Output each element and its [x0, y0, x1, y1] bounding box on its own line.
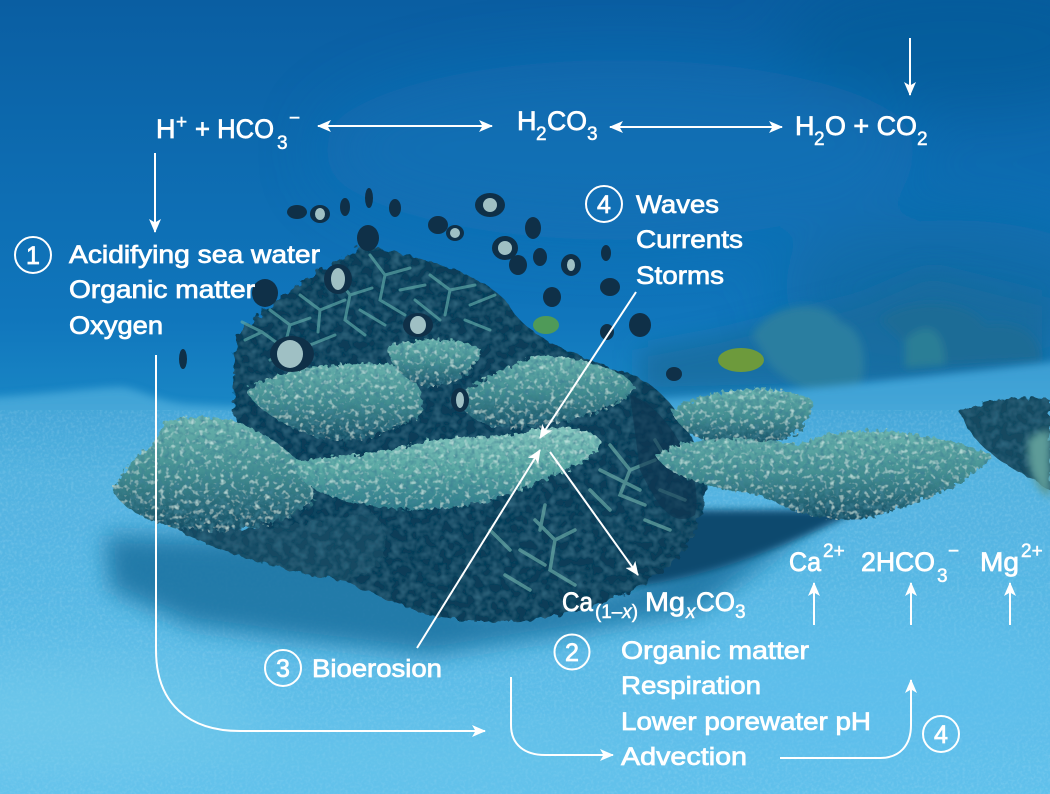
- number badge 3: [265, 650, 301, 686]
- formula: magnesian calcite: 3: [735, 602, 746, 623]
- text block: step 1 inputs: Oxygen: [69, 312, 163, 340]
- formula: magnesium ion: Mg: [980, 547, 1019, 577]
- equation: H2CO3: 2: [536, 124, 547, 145]
- equation: H2O + CO2: H: [795, 111, 814, 141]
- equation: H2O + CO2: O + CO: [825, 111, 917, 141]
- arrow: CO2 input from atmosphere: [909, 38, 911, 95]
- school of fish: [179, 188, 682, 412]
- background: distant reef: [640, 270, 1050, 399]
- number badge 3: 3: [276, 655, 290, 683]
- text block: physical forces: [636, 191, 743, 290]
- arrow: bioerosion to coral: [417, 450, 540, 648]
- arrow: sea water flowing to sediment: [156, 355, 485, 731]
- equation: H+ + HCO3-: +: [176, 112, 187, 133]
- label: bioerosion: Bioerosion: [312, 655, 442, 683]
- formula: bicarbonate ions: 2HCO: [861, 547, 935, 577]
- formula: magnesian calcite: Ca: [562, 587, 594, 617]
- equation: H+ + HCO3-: + HCO: [195, 114, 274, 144]
- coral: right edge outcrop: [960, 398, 1050, 498]
- equation: H+ + HCO3-: 3: [277, 133, 288, 154]
- formula: magnesium ion: 2+: [1021, 541, 1043, 562]
- coral: dark rear mass: [233, 245, 705, 621]
- arrow: calcium release: [813, 583, 815, 625]
- text block: step 1 inputs: [69, 241, 320, 340]
- coral: upper right table: [455, 356, 635, 429]
- text block: physical forces: Storms: [636, 262, 724, 290]
- equation: H+ + HCO3-: [156, 108, 300, 154]
- coral: upper left table: [246, 364, 422, 441]
- arrow: advection up to dissolved ions: [780, 680, 911, 758]
- formula: bicarbonate ions: −: [948, 541, 959, 562]
- formula: magnesian calcite: x: [685, 602, 697, 623]
- formula: magnesian calcite: (1–x): [595, 602, 638, 623]
- formula: calcium ion: [789, 541, 845, 577]
- arrow: carbonic acid and CO2 equilibrium: [610, 126, 782, 128]
- coral: upper centre table: [386, 340, 482, 387]
- formula: bicarbonate ions: [861, 541, 959, 587]
- text block: step 1 inputs: Organic matter: [69, 276, 255, 304]
- coral: right table front: [655, 431, 992, 520]
- background: water tone variation: [320, 0, 1050, 360]
- number badge 1: [15, 237, 51, 273]
- coral: left table: [112, 417, 315, 531]
- arrow: bicarbonate and carbonic acid equilibrium: [318, 125, 492, 127]
- fish: yellow fish: [718, 348, 764, 372]
- fish: yellow-green fish near coral: [533, 316, 559, 334]
- number badge 1: 1: [26, 242, 40, 270]
- formula: magnesian calcite: CO: [696, 587, 735, 617]
- coral shadow on the sand: [105, 510, 860, 655]
- number badge 4 top: 4: [597, 191, 611, 219]
- sand sea floor: [0, 360, 1050, 794]
- sand grain texture: [0, 410, 1050, 794]
- arrow: coral to carbonate sediment: [550, 452, 638, 575]
- text block: porewater processes: Lower porewater pH: [621, 708, 871, 736]
- arrow: magnesium release: [1009, 583, 1011, 625]
- text block: porewater processes: Respiration: [621, 672, 761, 700]
- formula: magnesian calcite: Mg: [645, 587, 685, 617]
- number badge 2: 2: [565, 639, 579, 667]
- arrow: bicarbonate release: [910, 583, 912, 625]
- text block: step 1 inputs: Acidifying sea water: [69, 241, 320, 269]
- number badge 4 bottom: 4: [934, 721, 948, 749]
- arrow: down to acidifying sea water: [154, 153, 156, 232]
- sand light and dark tones: [0, 620, 1050, 785]
- coral: front centre table: [292, 427, 602, 510]
- equation: H+ + HCO3-: H: [156, 114, 176, 144]
- number badge 4 bottom: [923, 716, 959, 752]
- equation: H2CO3: [517, 106, 598, 145]
- number badge 4 top: [586, 186, 622, 222]
- formula: magnesian calcite: [562, 587, 746, 623]
- arrow: physical forces to coral: [540, 292, 636, 438]
- formula: calcium ion: Ca: [789, 547, 822, 577]
- arrow: flow into advection: [511, 677, 613, 755]
- coral: lower left skirt: [170, 510, 386, 580]
- text block: porewater processes: Advection: [621, 743, 747, 771]
- equation: H2CO3: 3: [587, 124, 598, 145]
- equation: H2O + CO2: 2: [917, 129, 928, 150]
- number badge 2: [554, 634, 590, 670]
- formula: bicarbonate ions: 3: [937, 566, 948, 587]
- coral: dark crevice right side: [630, 395, 697, 519]
- formula: magnesium ion: [980, 541, 1043, 577]
- equation: H2CO3: CO: [547, 106, 587, 136]
- equation: H+ + HCO3-: −: [289, 108, 300, 129]
- formula: calcium ion: 2+: [823, 541, 845, 562]
- equation: H2O + CO2: 2: [814, 129, 825, 150]
- coral: staghorn branches on upper mound: [242, 255, 495, 360]
- coral: staghorn branches at lower right: [490, 440, 685, 590]
- equation: H2O + CO2: [795, 111, 928, 150]
- text block: porewater processes: Organic matter: [621, 637, 809, 665]
- text block: physical forces: Currents: [636, 226, 743, 254]
- equation: H2CO3: H: [517, 106, 536, 136]
- fish: pale body markings: [277, 198, 575, 408]
- coral: right table rear: [672, 389, 812, 445]
- text block: porewater processes: [621, 637, 871, 771]
- text block: physical forces: Waves: [636, 191, 719, 219]
